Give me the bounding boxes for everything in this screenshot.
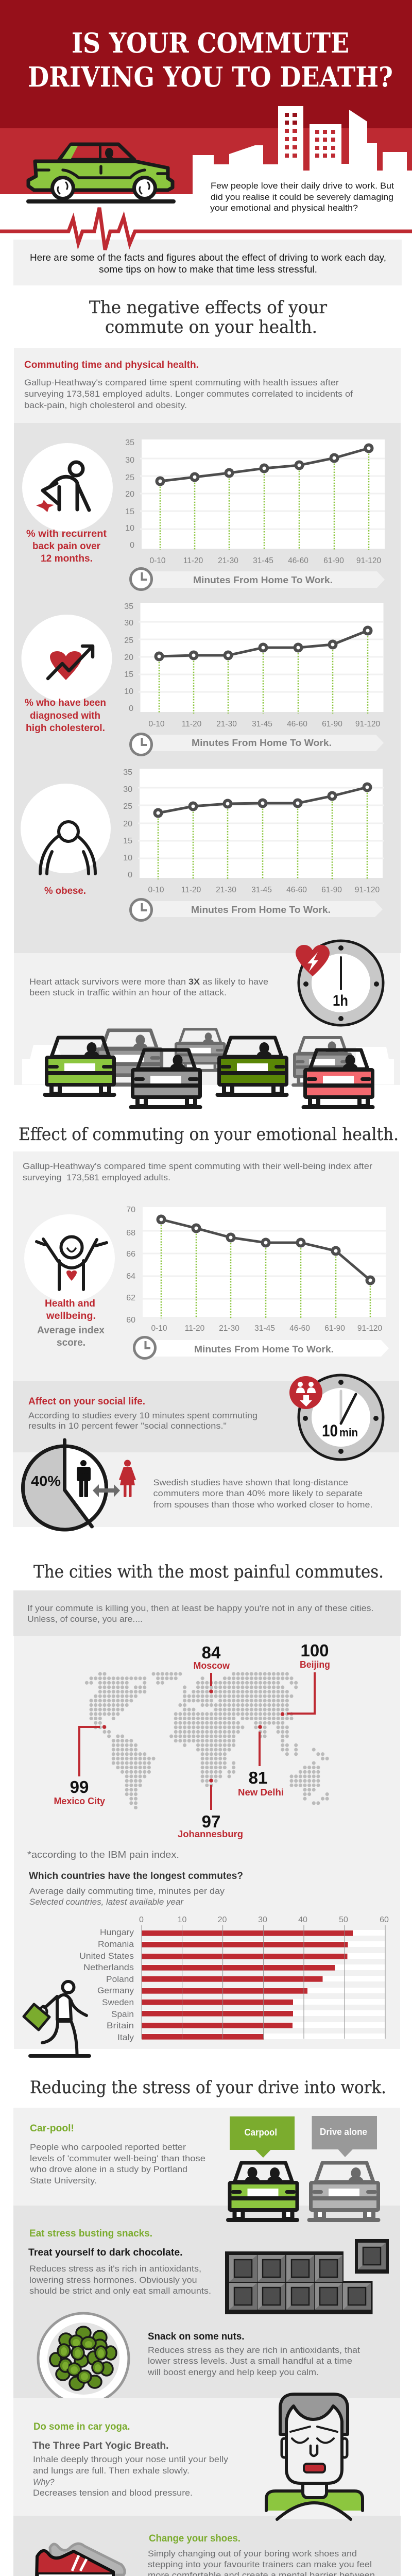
panel: heart attack traffic: been stuck in traffic within an hour of the attack. <box>29 988 227 997</box>
footnote: IBM pain index: *according to the IBM pain index. <box>27 1850 179 1860</box>
panel: commuting time and physical health: back-pain, high cholesterol and obesity. <box>24 400 187 410</box>
icon: city skyline <box>193 106 412 195</box>
panel: change your shoes <box>13 2516 401 2576</box>
line chart: back pain: 20 <box>125 490 134 499</box>
panel: in car yoga <box>13 2398 400 2516</box>
line chart: obese: 15 <box>123 837 132 845</box>
icon: back pain <box>22 443 113 532</box>
line chart: wellbeing index: 91-120 <box>357 1324 383 1333</box>
line chart: high cholesterol: 46-60 <box>287 720 307 728</box>
line chart: high cholesterol: 0 <box>129 704 133 713</box>
line chart: high cholesterol: 21-30 <box>216 720 237 728</box>
line chart: back pain: 46-60 <box>288 556 308 565</box>
label: high cholesterol <box>25 698 106 734</box>
bar chart: longest commutes: 0 <box>139 1916 144 1924</box>
label: health and wellbeing: Average index <box>37 1325 105 1336</box>
panel: facts intro: Here are some of the facts and figures about the effect of driving to work each day, <box>30 252 386 263</box>
panel: header <box>0 0 412 213</box>
text: swedish studies: from spouses than those who worked closer to home. <box>153 1500 373 1510</box>
line chart: obese: 20 <box>123 820 132 828</box>
icon: ten minute clock with people <box>289 1375 383 1460</box>
intro text: your emotional and physical health? <box>210 203 358 213</box>
bar chart: longest commutes: 20 <box>218 1916 227 1924</box>
callout: drive alone <box>312 2116 377 2157</box>
icon: 40 percent pie with couple: 40% <box>31 1473 61 1489</box>
panel: car-pool: levels of 'commuter well-being' than those <box>30 2154 205 2163</box>
panel: in car yoga: Inhale deeply through your nose until your belly <box>33 2454 229 2464</box>
line chart: wellbeing index: 64 <box>126 1272 135 1281</box>
map marker: Beijing: 100 <box>300 1641 329 1660</box>
line chart: high cholesterol: 15 <box>124 670 133 679</box>
line chart: obese: 61-90 <box>321 886 342 894</box>
map marker: Moscow: Moscow <box>194 1660 230 1671</box>
bar chart: longest commutes: Britain <box>107 2021 134 2030</box>
panel: commuting time and physical health: Gallup-Heathway's compared time spent commuting with health issues after <box>24 378 339 387</box>
bar chart: longest commutes: Sweden <box>102 1997 134 2007</box>
callout: drive alone: Drive alone <box>320 2127 367 2137</box>
line chart: obese: 0-10 <box>148 886 164 894</box>
panel: car-pool <box>13 2108 400 2206</box>
panel: snacks <box>13 2206 400 2398</box>
bar chart: longest commutes: United States <box>79 1951 134 1961</box>
heading: negative effects <box>89 297 328 337</box>
line chart: obese: 11-20 <box>181 886 201 894</box>
line chart: back pain: 61-90 <box>323 556 344 565</box>
label: back pain: back pain over <box>32 541 101 552</box>
bar chart: longest commutes: 60 <box>380 1916 389 1924</box>
panel: heart attack traffic: Heart attack survivors were more than 3X as likely to have <box>29 977 268 987</box>
line chart: back pain: 0-10 <box>149 556 166 565</box>
axis banner: minutes from home to work: Minutes From Home To Work. <box>192 738 332 748</box>
panel: snacks: Eat stress busting snacks. <box>29 2228 152 2239</box>
line chart: obese: 35 <box>123 768 132 777</box>
panel: car-pool: People who carpooled reported better <box>30 2142 186 2152</box>
icon: walking commuter <box>24 1981 91 2058</box>
label: high cholesterol: high cholesterol. <box>26 723 105 734</box>
line chart: high cholesterol: 0-10 <box>148 720 165 728</box>
map marker: Beijing: Beijing <box>300 1659 330 1670</box>
title: IS YOUR COMMUTE <box>72 27 349 59</box>
axis banner: minutes from home to work <box>134 1337 389 1358</box>
panel: commuting time and physical health: surveying 173,581 employed adults. Longer commutes correlated to incidents of <box>24 389 353 399</box>
panel: map and countries background <box>14 1636 400 2049</box>
line chart: back pain <box>125 438 385 565</box>
line chart: wellbeing index: 66 <box>126 1250 135 1259</box>
line chart: obese: 25 <box>123 802 132 811</box>
icon: traffic jam of cars <box>22 1029 394 1109</box>
line chart: obese: 10 <box>123 854 132 862</box>
heading: reducing stress: Reducing the stress of your drive into work. <box>30 2077 386 2098</box>
dotted world map <box>87 1674 327 1807</box>
heading: longest commutes: Average daily commuting time, minutes per day <box>29 1886 225 1896</box>
line chart: high cholesterol: 25 <box>124 636 133 645</box>
map marker: Mexico City: Mexico City <box>54 1796 105 1806</box>
bar chart: longest commutes: Spain <box>111 2009 134 2019</box>
panel: social life: Affect on your social life. <box>28 1396 145 1407</box>
map marker: Mexico City: 99 <box>70 1777 89 1797</box>
line chart: high cholesterol: 35 <box>124 602 133 611</box>
map marker: Moscow: 84 <box>202 1643 221 1662</box>
panel: emotional health: Gallup-Heathway's compared time spent commuting with their well-being index after <box>23 1161 372 1171</box>
bar chart: longest commutes: 10 <box>178 1916 186 1924</box>
map marker: Johannesburg: Johannesburg <box>178 1829 243 1839</box>
line chart: high cholesterol: 10 <box>124 687 133 696</box>
label: health and wellbeing: Health and <box>45 1298 95 1309</box>
line chart: wellbeing index <box>126 1206 386 1333</box>
line chart: back pain: 15 <box>125 507 134 516</box>
panel: change your shoes: Simply changing out of your boring work shoes and <box>148 2549 357 2558</box>
line chart: obese: 31-45 <box>251 886 272 894</box>
line chart: obese: 0 <box>128 871 132 879</box>
bar chart: longest commutes: Hungary <box>100 1927 134 1937</box>
panel: painful commutes intro <box>13 1590 401 1636</box>
line chart: obese <box>123 768 384 894</box>
axis banner: minutes from home to work <box>131 734 384 755</box>
line chart: back pain: 10 <box>125 524 134 533</box>
line chart: obese: 91-120 <box>355 886 380 894</box>
line chart: back pain: 25 <box>125 473 134 482</box>
line chart: wellbeing index: 21-30 <box>219 1324 239 1333</box>
line chart: high cholesterol <box>124 602 384 728</box>
bar chart: longest commutes: 50 <box>339 1916 348 1924</box>
bar chart: longest commutes: Romania <box>98 1939 134 1949</box>
panel: car-pool: who drove alone in a study by Portland <box>29 2164 187 2174</box>
label: back pain: % with recurrent <box>26 529 107 539</box>
panel: painful commutes intro: Unless, of course, you are.... <box>27 1614 143 1624</box>
title <box>28 27 393 93</box>
line chart: back pain: 31-45 <box>253 556 273 565</box>
panel: facts intro <box>13 240 402 285</box>
icon: one hour clock with heart <box>296 941 383 1025</box>
panel: in car yoga: Decreases tension and blood pressure. <box>33 2488 193 2498</box>
line chart: back pain: 91-120 <box>356 556 382 565</box>
line chart: wellbeing index: 70 <box>126 1206 135 1214</box>
label: high cholesterol: % who have been <box>25 698 106 708</box>
axis banner: minutes from home to work: Minutes From Home To Work. <box>191 905 331 915</box>
callout: carpool: Carpool <box>244 2127 277 2138</box>
line chart: wellbeing index: 62 <box>126 1294 135 1302</box>
bar chart: longest commutes: 30 <box>258 1916 267 1924</box>
panel: snacks: will boost energy and help keep you calm. <box>147 2367 319 2377</box>
label: health and wellbeing <box>37 1298 105 1348</box>
panel: change your shoes: Change your shoes. <box>149 2533 241 2544</box>
bar chart: longest commutes: 40 <box>298 1916 307 1924</box>
panel: change your shoes: stepping into your favourite trainers can make you feel <box>148 2560 372 2569</box>
text: swedish studies: Swedish studies have shown that long-distance <box>153 1478 348 1487</box>
line chart: wellbeing index: 0-10 <box>151 1324 167 1333</box>
heading: longest commutes: Selected countries, latest available year <box>29 1897 184 1907</box>
icon: ten minute clock with people: min <box>339 1426 358 1439</box>
map marker: New Delhi <box>238 1725 284 1798</box>
line chart: wellbeing index: 46-60 <box>289 1324 310 1333</box>
panel: commuting time and physical health: Commuting time and physical health. <box>24 360 199 370</box>
line chart: high cholesterol: 91-120 <box>355 720 381 728</box>
icon: green car <box>26 144 176 204</box>
icon: trainers <box>36 2544 125 2576</box>
panel: car-pool: State University. <box>30 2176 97 2185</box>
icon: 40 percent pie with couple <box>23 1440 136 1530</box>
map marker: Johannesburg <box>178 1778 243 1839</box>
panel: snacks: Reduces stress as they are rich in antioxidants, that <box>148 2345 360 2355</box>
panel: snacks: should be strict and only eat small amounts. <box>29 2286 211 2296</box>
panel: social life: According to studies every 10 minutes spent commuting <box>28 1411 258 1420</box>
panel: snacks: Snack on some nuts. <box>148 2331 244 2342</box>
heading: painful commutes: The cities with the most painful commutes. <box>33 1562 384 1582</box>
line chart: wellbeing index: 11-20 <box>185 1324 205 1333</box>
icon: chocolate bar <box>225 2239 389 2314</box>
line chart: wellbeing index: 68 <box>126 1229 135 1238</box>
line chart: obese: 30 <box>123 785 132 794</box>
panel: social life <box>13 1381 399 1527</box>
panel: snacks: lower stress levels. Just a small handful at a time <box>148 2356 352 2366</box>
icon: ten minute clock with people: 10 <box>322 1421 338 1440</box>
line chart: back pain: 30 <box>125 456 134 465</box>
label: health and wellbeing: wellbeing. <box>46 1311 96 1321</box>
icon: heart with rising arrow <box>22 615 112 702</box>
line chart: high cholesterol: 20 <box>124 653 133 662</box>
callout: carpool <box>230 2116 295 2158</box>
heading: longest commutes: Which countries have the longest commutes? <box>29 1871 243 1882</box>
panel: facts intro: some tips on how to make that time less stressful. <box>99 264 317 275</box>
icon: happy person <box>24 1214 115 1302</box>
icon: heartbeat line <box>0 208 412 250</box>
icon: solo car <box>307 2163 380 2222</box>
line chart: back pain: 35 <box>125 438 134 447</box>
line chart: wellbeing index: 31-45 <box>254 1324 275 1333</box>
panel: car-pool: Car-pool! <box>30 2123 74 2134</box>
intro text: Few people love their daily drive to work. But <box>211 181 394 191</box>
axis banner: minutes from home to work: Minutes From Home To Work. <box>193 575 333 585</box>
axis banner: minutes from home to work: Minutes From Home To Work. <box>194 1344 334 1354</box>
panel: snacks: lowering stress hormones. Obviously you <box>29 2275 197 2285</box>
heading: longest commutes <box>29 1871 243 1907</box>
line chart: high cholesterol: 31-45 <box>252 720 272 728</box>
icon: one hour clock with heart: 1h <box>333 992 348 1009</box>
line chart: obese: 21-30 <box>216 886 236 894</box>
line chart: back pain: 11-20 <box>183 556 203 565</box>
text: swedish studies: commuters more than 40% more likely to separate <box>153 1488 363 1498</box>
line chart: wellbeing index: 60 <box>126 1316 135 1325</box>
bar chart: longest commutes <box>79 1916 389 2042</box>
line chart: wellbeing index: 61-90 <box>324 1324 345 1333</box>
panel: emotional health: surveying 173,581 employed adults. <box>23 1173 170 1182</box>
panel: in car yoga: Do some in car yoga. <box>33 2421 130 2432</box>
map marker: Mexico City <box>54 1725 106 1806</box>
panel: emotional health <box>13 1151 399 1381</box>
bar chart: longest commutes: Germany <box>97 1986 134 1995</box>
map marker: Beijing <box>281 1641 330 1716</box>
line chart: high cholesterol: 61-90 <box>322 720 342 728</box>
label: obese: % obese. <box>44 886 86 896</box>
bar chart: longest commutes: Netherlands <box>83 1962 134 1972</box>
panel: in car yoga: and lungs are full. Then exhale slowly. <box>33 2466 190 2476</box>
intro text: did you realise it could be severely damaging <box>211 192 393 202</box>
panel: commuting time and physical health <box>14 348 401 423</box>
line chart: back pain: 0 <box>130 541 134 550</box>
panel: painful commutes intro: If your commute is killing you, then at least be happy you're not in any of these cities. <box>27 1603 373 1613</box>
line chart: obese: 46-60 <box>286 886 307 894</box>
bar chart: longest commutes: Poland <box>106 1974 134 1984</box>
text: swedish studies <box>153 1478 373 1510</box>
heading: negative effects: commute on your health. <box>105 317 317 337</box>
panel: charts background <box>14 423 401 953</box>
label: back pain: 12 months. <box>41 553 93 564</box>
panel: snacks: Treat yourself to dark chocolate. <box>28 2247 183 2258</box>
panel: in car yoga: The Three Part Yogic Breath. <box>32 2441 169 2451</box>
map marker: Moscow <box>194 1643 230 1693</box>
line chart: high cholesterol: 11-20 <box>182 720 202 728</box>
panel: snacks: Reduces stress as it's rich in antioxidants, <box>29 2264 201 2274</box>
label: back pain <box>26 529 107 564</box>
label: health and wellbeing: score. <box>57 1337 85 1348</box>
panel: heart attack traffic <box>14 953 400 1085</box>
map marker: New Delhi: New Delhi <box>238 1787 284 1798</box>
label: high cholesterol: diagnosed with <box>30 710 100 721</box>
icon: plate of nuts <box>38 2313 129 2404</box>
axis banner: minutes from home to work <box>131 900 383 920</box>
axis banner: minutes from home to work <box>131 569 385 589</box>
heading: negative effects: The negative effects of your <box>89 297 328 318</box>
panel: in car yoga: Why? <box>33 2477 55 2487</box>
icon: carpool car <box>226 2163 299 2222</box>
icon: obese person <box>21 784 111 874</box>
line chart: high cholesterol: 30 <box>124 619 133 628</box>
bar chart: longest commutes: Italy <box>117 2032 134 2042</box>
icon: breathing driver <box>266 2394 363 2519</box>
intro text <box>210 181 394 213</box>
panel: social life: results in 10 percent fewer "social connections." <box>28 1421 227 1431</box>
map marker: New Delhi: 81 <box>249 1768 267 1787</box>
map marker: Johannesburg: 97 <box>202 1812 220 1831</box>
line chart: back pain: 21-30 <box>218 556 238 565</box>
